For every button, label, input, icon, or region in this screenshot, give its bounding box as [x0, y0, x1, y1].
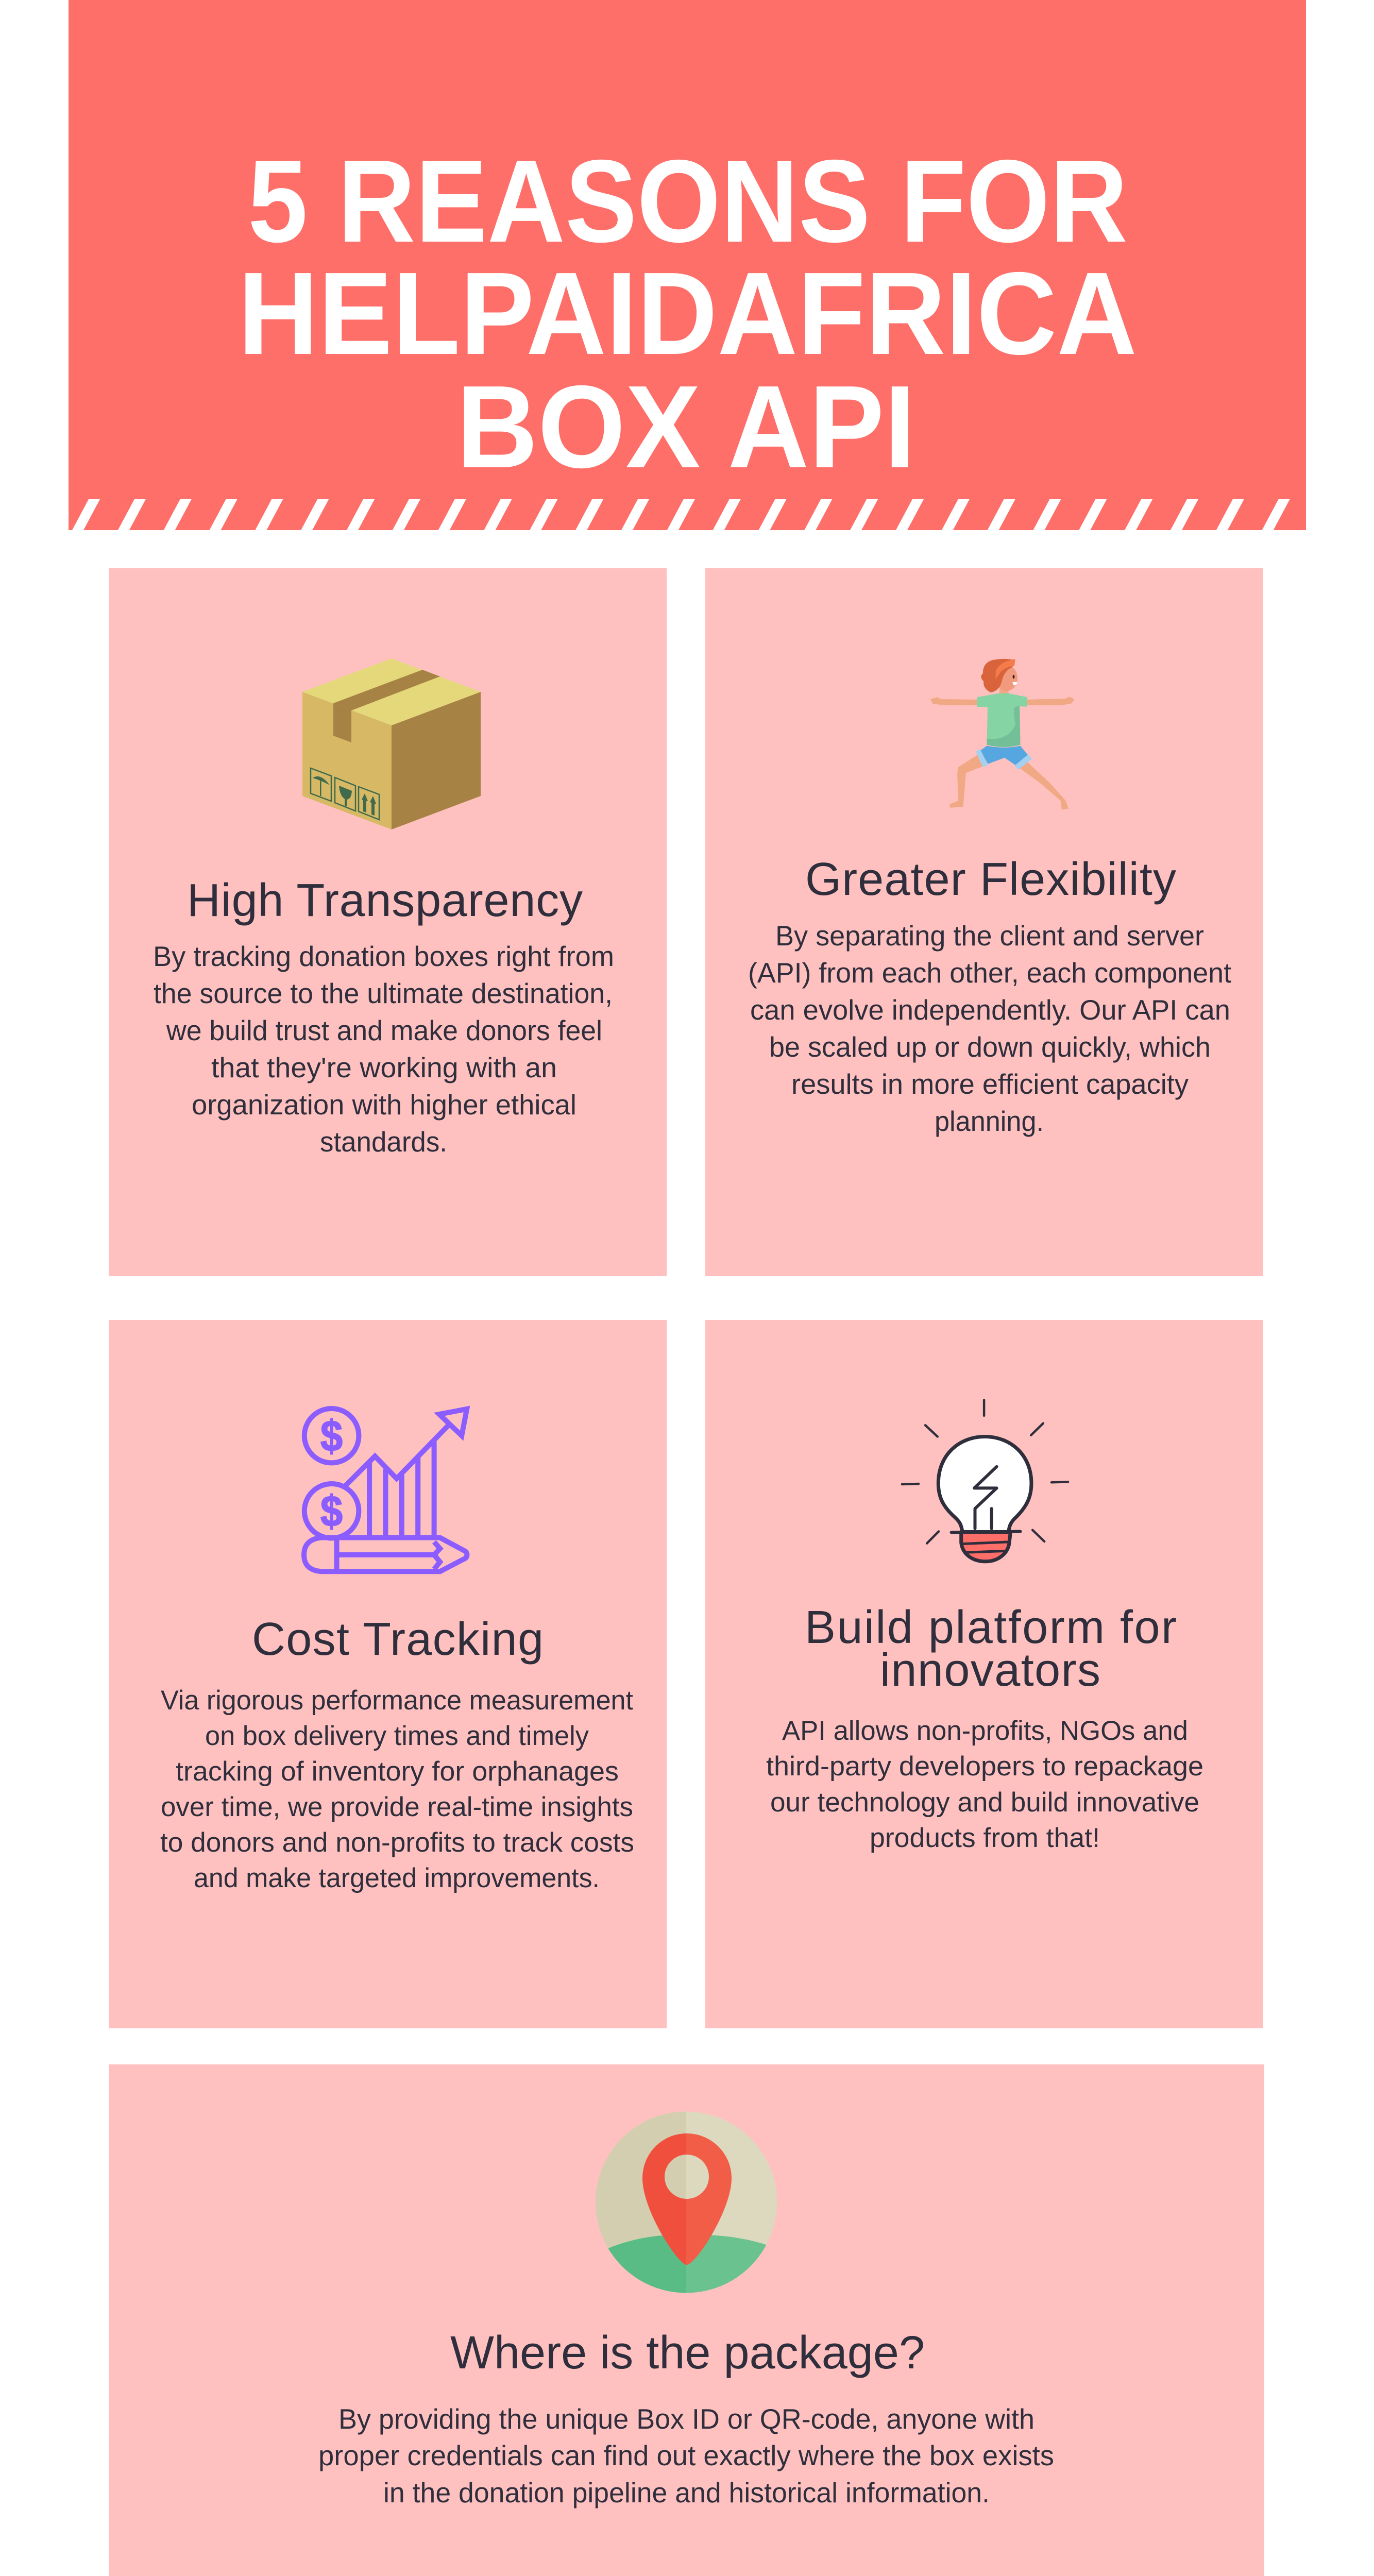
- body text: [748, 920, 1231, 1137]
- body text: [766, 1716, 1203, 1853]
- body text: organization with higher ethical: [192, 1089, 576, 1121]
- body text: [318, 2403, 1054, 2509]
- body text: tracking of inventory for orphanages: [176, 1756, 619, 1787]
- body text: that they're working with an: [211, 1052, 557, 1083]
- body text: By providing the unique Box ID or QR-code, anyone with: [338, 2403, 1034, 2435]
- body text: API allows non-profits, NGOs and: [782, 1716, 1188, 1746]
- body text: Via rigorous performance measurement: [161, 1685, 633, 1716]
- body text: third-party developers to repackage: [766, 1751, 1203, 1782]
- body text: we build trust and make donors feel: [166, 1014, 602, 1046]
- body text: By tracking donation boxes right from: [153, 940, 614, 972]
- body text: in the donation pipeline and historical information.: [383, 2477, 990, 2509]
- heading: build platform for innovators: [805, 1602, 1177, 1696]
- title: 5 REASONS FOR: [248, 136, 1128, 267]
- body text: on box delivery times and timely: [205, 1721, 589, 1751]
- icon: location pin: [596, 2111, 777, 2298]
- icon: light bulb: [902, 1400, 1068, 1562]
- title: [238, 136, 1137, 493]
- icon: coins, chart and pencil: $: [320, 1487, 343, 1535]
- heading: high transparency: High Transparency: [187, 875, 583, 926]
- title: BOX API: [456, 362, 915, 493]
- header banner: [69, 0, 1306, 530]
- icon: yoga figure: [930, 659, 1074, 810]
- body text: our technology and build innovative: [770, 1787, 1199, 1818]
- body text: over time, we provide real-time insights: [161, 1792, 633, 1822]
- heading: build platform for innovators: innovators: [880, 1645, 1100, 1696]
- heading: cost tracking: Cost Tracking: [252, 1614, 544, 1665]
- icon: coins, chart and pencil: $: [320, 1412, 343, 1460]
- body text: the source to the ultimate destination,: [154, 977, 613, 1009]
- body text: By separating the client and server: [775, 920, 1204, 952]
- body text: proper credentials can find out exactly where the box exists: [318, 2439, 1054, 2471]
- body text: and make targeted improvements.: [194, 1863, 600, 1893]
- body text: to donors and non-profits to track costs: [160, 1827, 634, 1858]
- body text: can evolve independently. Our API can: [750, 994, 1230, 1026]
- body text: [160, 1685, 634, 1893]
- panel: build platform for innovators: [705, 1320, 1263, 2028]
- panel: high transparency: [109, 568, 667, 1276]
- panel: greater flexibility: [705, 568, 1263, 1276]
- body text: [153, 940, 614, 1158]
- title: HELPAIDAFRICA: [238, 248, 1137, 379]
- body text: standards.: [320, 1126, 447, 1158]
- panel: cost tracking: [109, 1320, 667, 2028]
- body text: planning.: [935, 1105, 1044, 1137]
- heading: greater flexibility: Greater Flexibility: [805, 854, 1176, 905]
- icon: cardboard box: [302, 658, 481, 829]
- body text: (API) from each other, each component: [748, 957, 1231, 989]
- heading: build platform for innovators: Build platform for: [805, 1602, 1177, 1653]
- icon: coins, chart and pencil: [304, 1409, 467, 1571]
- heading: where is the package: Where is the package?: [450, 2327, 925, 2379]
- body text: products from that!: [870, 1823, 1100, 1853]
- body text: be scaled up or down quickly, which: [769, 1031, 1211, 1063]
- panel: where is the package: [109, 2064, 1264, 2576]
- body text: results in more efficient capacity: [791, 1068, 1189, 1100]
